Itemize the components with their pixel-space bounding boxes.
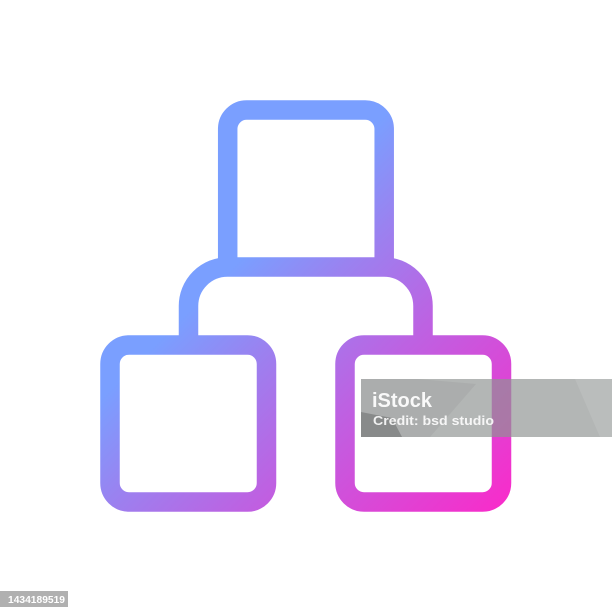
watermark band bbox=[361, 379, 612, 437]
connector bbox=[188, 267, 423, 345]
bottom left box bbox=[110, 345, 266, 502]
watermark credit text: Credit: bsd studio bbox=[373, 414, 494, 428]
image id tag: 1434189519 bbox=[8, 594, 65, 606]
bottom right box bbox=[345, 345, 502, 502]
image id tag bbox=[0, 591, 68, 607]
top box bbox=[228, 110, 384, 267]
watermark logo text: iStock bbox=[372, 390, 433, 412]
